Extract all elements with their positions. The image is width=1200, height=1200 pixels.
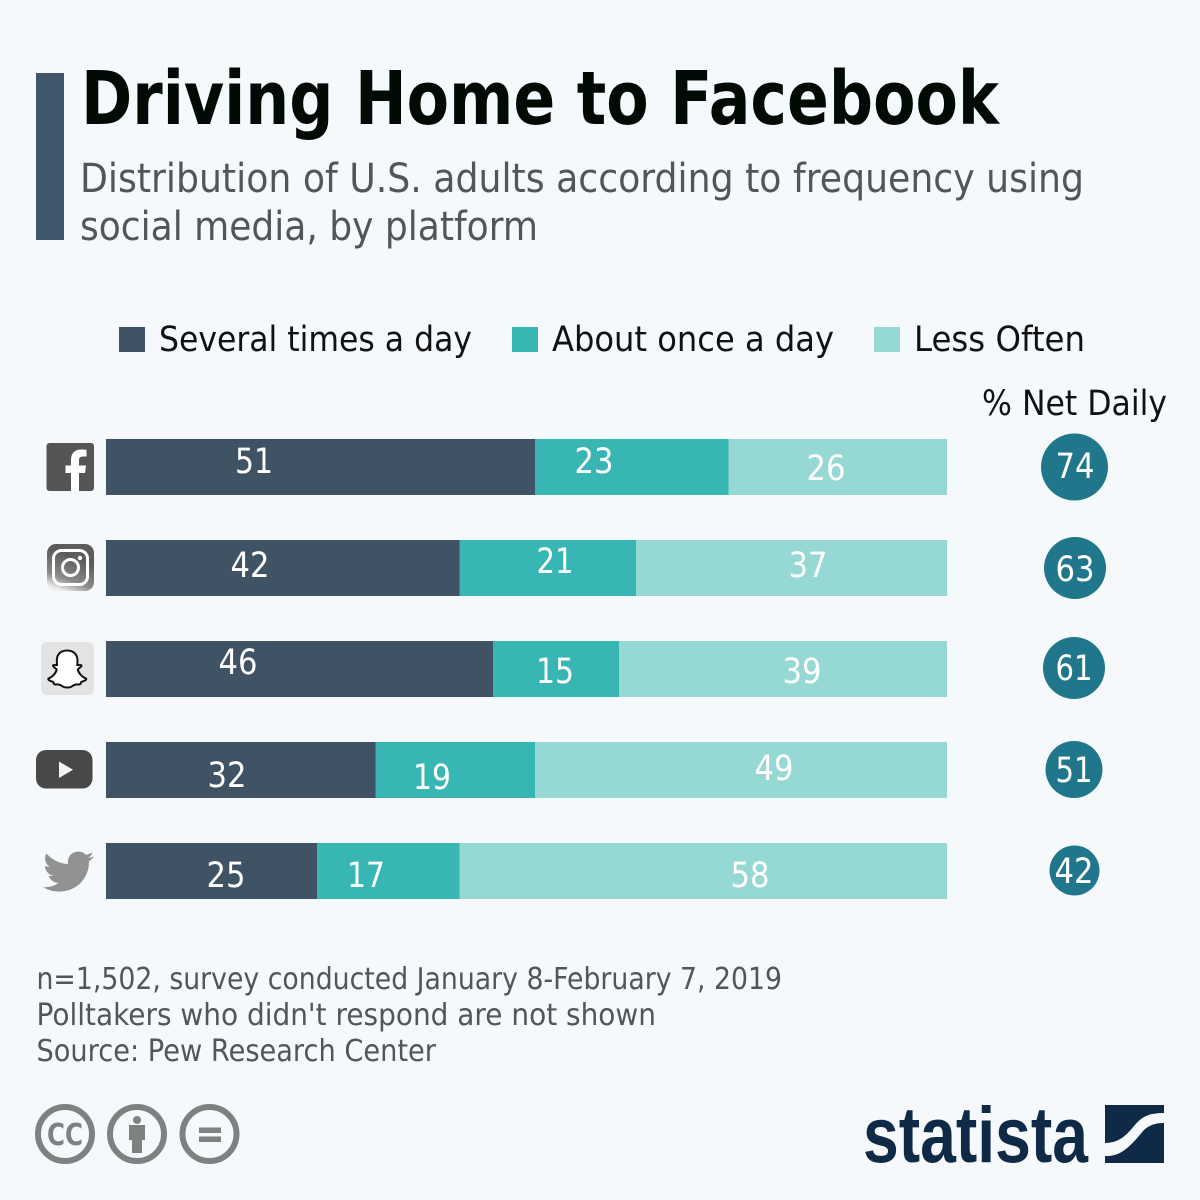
net daily badge: Facebook: [1041, 434, 1108, 500]
bar row: Instagram: 21: [536, 542, 574, 582]
bar row: Instagram: 37: [788, 546, 828, 586]
bar row: Snapchat: [106, 641, 947, 697]
icon: youtube: [36, 750, 92, 788]
net daily badge: Snapchat: 61: [1056, 649, 1092, 689]
icon: twitter: [43, 852, 94, 892]
icon: snapchat: [41, 642, 94, 695]
footnote and source: n=1,502, survey conducted January 8-February 7, 2019: [36, 962, 782, 997]
bar row: Facebook: 23: [574, 442, 614, 482]
bar row: Instagram: 42: [230, 546, 270, 586]
legend: About once a day: [552, 320, 834, 360]
bar row: Twitter: 58: [730, 856, 770, 896]
footnote and source: [36, 962, 782, 1069]
bar row: Snapchat: 15: [536, 652, 574, 692]
net daily badge: Facebook: 74: [1056, 447, 1094, 487]
bar row: Twitter: 25: [206, 856, 246, 896]
legend: [119, 320, 1085, 360]
bar row: YouTube: 19: [413, 758, 451, 798]
bar row: Facebook: 51: [235, 442, 273, 482]
legend: Less Often: [914, 320, 1085, 360]
net daily badge: YouTube: 51: [1056, 751, 1092, 791]
net daily badge: Twitter: 42: [1054, 852, 1094, 892]
legend: Several times a day: [159, 320, 472, 360]
statista logo mark: [1105, 1105, 1164, 1163]
net daily badge: YouTube: [1046, 741, 1102, 798]
icon: instagram: [47, 544, 94, 591]
icon: no derivatives: [182, 1107, 236, 1161]
bar row: Facebook: 26: [806, 449, 846, 489]
statista wordmark: statista: [863, 1090, 1089, 1179]
bar row: Twitter: [106, 843, 947, 899]
net daily badge: Snapchat: [1043, 637, 1105, 699]
icon: attribution: [110, 1107, 164, 1161]
footnote and source: Source: Pew Research Center: [36, 1034, 437, 1069]
net daily badge: Instagram: [1044, 537, 1106, 599]
net daily column heading: % Net Daily: [982, 384, 1167, 424]
bar row: Facebook: [106, 439, 947, 495]
net daily badge: Instagram: 63: [1056, 550, 1094, 590]
bar row: Snapchat: 39: [782, 652, 822, 692]
bar row: Instagram: [106, 540, 947, 596]
footnote and source: Polltakers who didn't respond are not shown: [36, 998, 656, 1033]
header accent bar: [36, 73, 64, 240]
icon: facebook: [46, 443, 94, 491]
icon: creative commons: CC: [47, 1118, 83, 1153]
bar row: Twitter: 17: [347, 856, 385, 896]
bar row: Snapchat: 46: [218, 643, 258, 683]
subtitle: Distribution of U.S. adults according to frequency using: [80, 156, 1084, 202]
bar row: YouTube: 32: [208, 756, 246, 796]
title: Driving Home to Facebook: [81, 56, 1000, 142]
icon: creative commons: [38, 1107, 92, 1161]
bar row: YouTube: 49: [754, 749, 794, 789]
subtitle: [80, 156, 1084, 250]
bar row: YouTube: [106, 742, 947, 798]
subtitle: social media, by platform: [80, 204, 538, 250]
